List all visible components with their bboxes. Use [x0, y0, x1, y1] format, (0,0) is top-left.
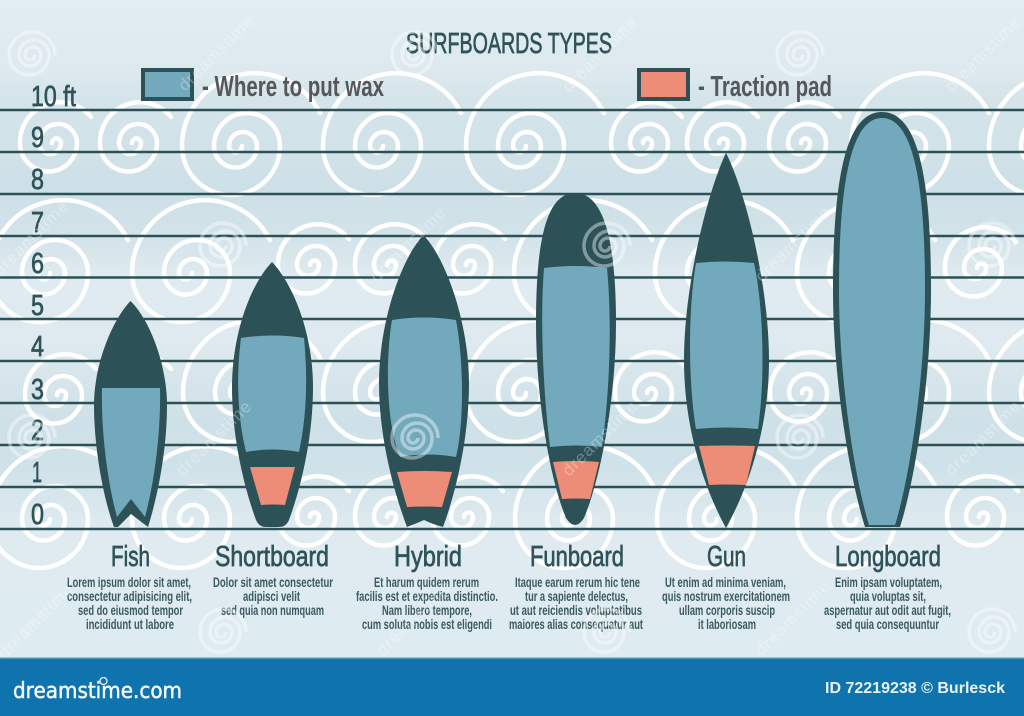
- label: fish: Fish: [111, 541, 150, 573]
- board: gun: [684, 153, 769, 528]
- height axis labels: 1: [32, 457, 42, 489]
- watermark text: dreamstime: [558, 13, 642, 96]
- height axis labels: [31, 81, 76, 531]
- height axis labels: 4: [31, 331, 44, 363]
- height axis labels: 5: [31, 290, 44, 322]
- surfboards: [94, 112, 931, 528]
- height axis labels: 7: [31, 207, 44, 239]
- label: gun: Ut enim ad minima veniam,: [665, 574, 786, 590]
- wave swirl pattern: [0, 73, 1024, 568]
- label: gun: it laboriosam: [698, 616, 756, 632]
- label: shortboard: sed quia non numquam: [221, 602, 324, 618]
- title: SURFBOARDS TYPES: [406, 28, 612, 60]
- legend: traction pad: - Traction pad: [698, 71, 832, 103]
- watermark text: dreamstime: [751, 203, 835, 286]
- footer credit: ID 72219238 © Burlesck: [825, 680, 1005, 697]
- label: funboard: Funboard: [530, 541, 624, 573]
- label: funboard: ut aut reiciendis voluptatibus: [510, 602, 642, 618]
- label: longboard: [824, 541, 951, 632]
- label: hybrid: facilis est et expedita distinctio.: [356, 588, 498, 604]
- height axis labels: 6: [31, 248, 44, 280]
- label: fish: Lorem ipsum dolor sit amet,: [67, 574, 191, 590]
- label: hybrid: Nam libero tempore,: [382, 602, 472, 618]
- height axis labels: 9: [31, 122, 44, 154]
- label: fish: sed do eiusmod tempor: [78, 602, 183, 618]
- board: shortboard: [232, 262, 313, 527]
- label: shortboard: Dolor sit amet consectetur: [213, 574, 333, 590]
- legend: wax: [143, 70, 384, 103]
- board: funboard: [536, 193, 616, 525]
- watermark text: dreamstime: [941, 397, 1024, 480]
- height axis labels: 2: [31, 415, 44, 447]
- label: longboard: Enim ipsam voluptatem,: [835, 574, 942, 590]
- label: longboard: aspernatur aut odit aut fugit,: [824, 602, 951, 618]
- label: hybrid: cum soluta nobis est eligendi: [362, 616, 492, 632]
- label: gun: quis nostrum exercitationem: [662, 588, 790, 604]
- footer logo: dreamstime.com: [13, 679, 182, 704]
- legend: traction pad: [639, 70, 832, 103]
- watermark text: dreamstime: [751, 577, 835, 660]
- height axis labels: 8: [31, 164, 44, 196]
- label: funboard: maiores alias consequatur aut: [509, 616, 643, 632]
- label: fish: [67, 541, 192, 632]
- label: gun: Gun: [707, 541, 746, 573]
- label: gun: [662, 541, 790, 632]
- legend: wax: - Where to put wax: [202, 71, 384, 103]
- watermark text: dreamstime: [558, 397, 642, 480]
- board: hybrid: [379, 235, 469, 527]
- label: hybrid: Hybrid: [394, 541, 462, 573]
- label: funboard: Itaque earum rerum hic tene: [515, 574, 640, 590]
- height axis labels: 3: [31, 374, 44, 406]
- label: shortboard: Shortboard: [215, 541, 329, 573]
- board: fish: [94, 301, 167, 527]
- height scale lines: [0, 110, 1024, 529]
- height axis labels: 0: [31, 499, 44, 531]
- footer bar: [0, 658, 1024, 716]
- label: hybrid: Et harum quidem rerum: [374, 574, 479, 590]
- label: funboard: tur a sapiente delectus,: [525, 588, 628, 604]
- board: longboard: [833, 112, 931, 527]
- label: funboard: [509, 541, 643, 632]
- label: longboard: Longboard: [835, 541, 941, 573]
- label: longboard: sed quia consequuntur: [836, 616, 939, 632]
- label: shortboard: adipisci velit: [243, 588, 300, 604]
- label: longboard: quia voluptas sit,: [850, 588, 926, 604]
- watermark text: dreamstime: [941, 13, 1024, 96]
- label: fish: incididunt ut labore: [86, 616, 174, 632]
- label: shortboard: [213, 541, 333, 618]
- height axis labels: 10 ft: [31, 81, 76, 113]
- label: gun: ullam corporis suscip: [679, 602, 775, 618]
- watermark text: dreamstime: [172, 397, 256, 480]
- watermark text: dreamstime: [372, 577, 456, 660]
- watermark text: dreamstime: [174, 12, 258, 95]
- label: hybrid: [356, 541, 498, 632]
- label: fish: consectetur adipisicing elit,: [67, 588, 192, 604]
- watermark text: dreamstime: [366, 203, 450, 286]
